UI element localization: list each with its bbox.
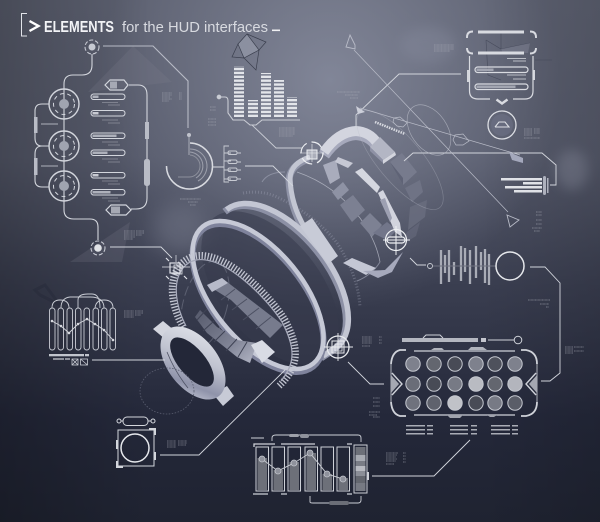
title: ELEMENTS: [44, 19, 114, 36]
comb chart: [49, 294, 116, 365]
small solid ring: [147, 315, 239, 411]
title: for the HUD interfaces: [122, 19, 268, 36]
radial gauge: [166, 133, 224, 189]
bottom bar chart: [251, 434, 368, 505]
tiny text blocks: [124, 45, 584, 464]
equalizer connector: [217, 95, 302, 148]
crosshair bottom: [324, 333, 353, 361]
panel: circle grid: [391, 335, 537, 434]
crosshair left: [162, 255, 190, 279]
crosshair right: [383, 226, 410, 255]
dashed outer arcs: [172, 172, 380, 354]
left circuit: [34, 40, 188, 255]
mesh polygon top: [232, 34, 266, 70]
rings assembly: [140, 131, 427, 414]
tiny captions: [102, 102, 120, 201]
bars right: [501, 176, 548, 195]
ring B outer: [225, 203, 348, 358]
top node: [85, 40, 99, 54]
bottom node: [91, 241, 105, 255]
ring B inner: [168, 198, 348, 395]
inner cylinder segments: [195, 278, 283, 363]
ring A segmented: [289, 131, 427, 278]
hex tags: [105, 80, 128, 90]
crossing guide lines: [343, 35, 523, 227]
connector lines to rings: [92, 74, 560, 476]
pills on lines: [34, 117, 150, 186]
title: [22, 14, 280, 36]
icon: dial circle: [488, 111, 516, 139]
waveform and circle: [428, 246, 524, 285]
gear ring: [172, 255, 295, 387]
dashed dark ellipse: [140, 368, 194, 414]
tree connector: [224, 146, 241, 182]
square circle widget: [117, 417, 155, 467]
progress bars: [91, 94, 125, 195]
equalizer: [239, 66, 292, 117]
three dial circles: [49, 89, 79, 201]
crosshair upper: [300, 142, 324, 164]
panel: top right form: [467, 30, 552, 104]
connector lines: [64, 54, 98, 240]
ring interior shading: [175, 187, 365, 389]
